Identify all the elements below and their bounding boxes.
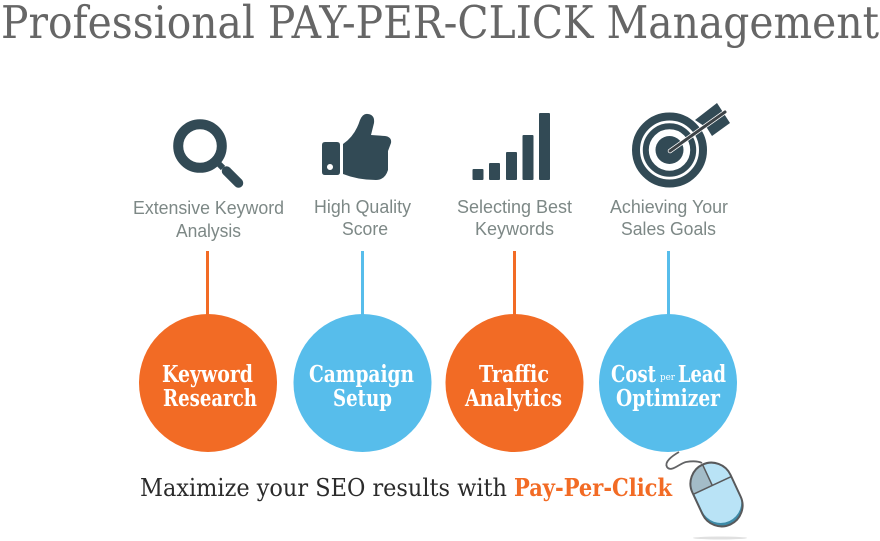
connector line [206,251,209,315]
label: high quality score: High Quality [314,197,411,217]
label: high quality score: Score [342,219,388,239]
tagline: Maximize your SEO results with [140,474,507,502]
circle: cost per lead optimizer: Lead [678,361,726,388]
circle: cost per lead optimizer: Optimizer [616,385,721,412]
label: selecting best keywords [457,197,572,239]
icon: magnifying glass [178,124,238,183]
icon: thumbs up [322,114,391,180]
connector line [667,251,670,315]
circle: campaign setup [294,314,432,452]
label: extensive keyword analysis: Extensive Keyword [133,198,284,218]
circle: keyword research: Research [163,385,257,412]
label: extensive keyword analysis: Analysis [176,221,241,241]
circle: cost per lead optimizer: Cost [611,361,656,388]
label: selecting best keywords: Selecting Best [457,197,572,217]
circle: keyword research [139,314,277,452]
tagline: Pay-Per-Click [514,473,673,502]
circle: traffic analytics: Traffic [479,361,549,388]
circle: keyword research: Keyword [162,361,253,388]
icon: target with arrow [636,103,730,184]
icon: signal bars [472,113,550,180]
icon: computer mouse [666,452,749,540]
label: extensive keyword analysis [133,198,284,241]
panel: sales goals feature [599,103,737,452]
panel: quality score feature [294,114,432,452]
circle: cost per lead optimizer: per [660,373,676,383]
circle: traffic analytics: Analytics [464,385,562,412]
label: selecting best keywords: Keywords [475,219,554,239]
panel: best keywords feature [446,113,584,452]
circle: campaign setup: Campaign [309,361,414,388]
label: achieving your sales goals: Achieving Your [610,197,728,217]
connector line [361,251,364,315]
circle: campaign setup: Setup [333,385,392,412]
connector line [513,251,516,315]
circle: traffic analytics [446,314,584,452]
label: achieving your sales goals [610,197,728,239]
circle: cost per lead optimizer [599,314,737,452]
label: high quality score [314,197,411,239]
panel: keyword analysis feature [133,124,284,452]
label: achieving your sales goals: Sales Goals [621,219,716,239]
